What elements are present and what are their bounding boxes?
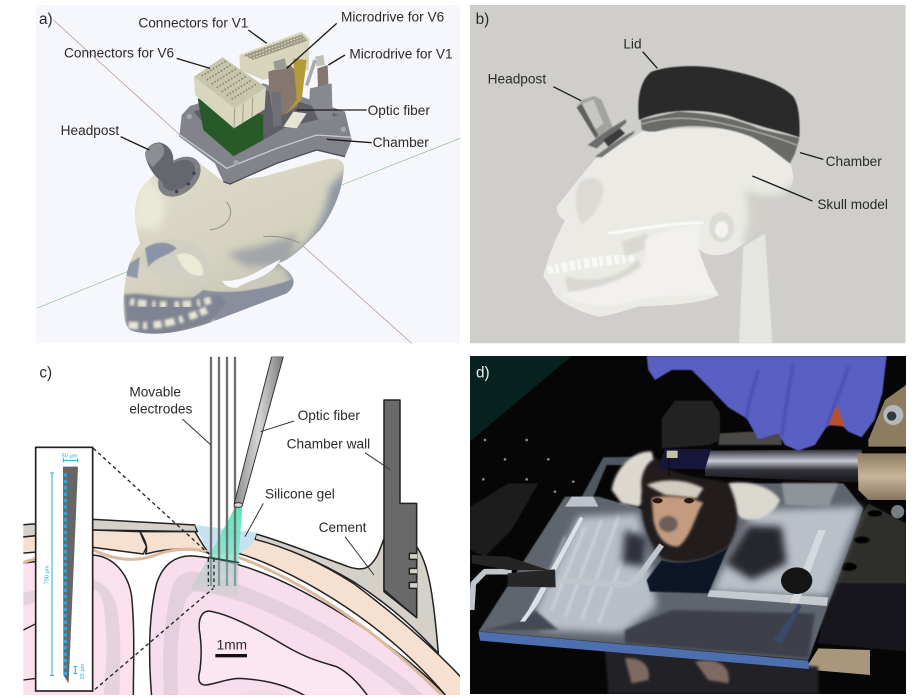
skull shading bbox=[282, 168, 344, 286]
labels and leaders panel a: Microdrive for V6 bbox=[341, 10, 444, 25]
panel c: cross-section schematic bbox=[20, 357, 467, 698]
panel b: photo of printed skull model bbox=[470, 5, 906, 343]
skull bone right bbox=[238, 538, 467, 697]
microdrives bbox=[268, 55, 333, 127]
inset: probe close-up: 790 µm bbox=[45, 565, 51, 584]
ventricle bbox=[199, 611, 368, 697]
support pole bbox=[739, 233, 772, 343]
skull left with bone flap bbox=[20, 519, 209, 563]
chamber wall bbox=[384, 400, 417, 618]
suture lines bbox=[210, 202, 300, 243]
silicone gel bbox=[195, 525, 257, 554]
black cube clamp bbox=[662, 401, 720, 448]
scratch streaks bbox=[545, 517, 635, 623]
labels and leaders panel a: Connectors for V1 bbox=[138, 16, 248, 31]
left hemisphere bbox=[20, 555, 134, 697]
labels and leaders panel a: Headpost bbox=[61, 123, 119, 138]
metal tube and handle bbox=[472, 545, 662, 610]
skull model bbox=[120, 153, 350, 340]
light cone bbox=[190, 507, 242, 597]
cement bbox=[255, 534, 438, 653]
teal corner bbox=[470, 356, 572, 442]
dashed zoom lines bbox=[93, 448, 214, 689]
labels and leaders panel b: Headpost bbox=[488, 71, 546, 86]
left mount block bbox=[470, 483, 538, 557]
labels and leaders panel c: Optic fiber bbox=[298, 408, 360, 423]
acrylic plate bbox=[478, 483, 863, 669]
labels and leaders panel c: Movable bbox=[129, 385, 181, 400]
skull soft shading bbox=[742, 184, 792, 243]
neck cutout bbox=[647, 547, 728, 593]
labels and leaders panel c bbox=[39, 364, 391, 575]
pia line bbox=[208, 557, 239, 563]
glove shading bbox=[747, 363, 848, 437]
dark table studs bbox=[482, 439, 575, 493]
orbit bbox=[144, 240, 177, 254]
labels and leaders panel b: Skull model bbox=[817, 197, 888, 212]
labels and leaders panel a: Microdrive for V1 bbox=[349, 47, 453, 62]
labels and leaders panel c: Cement bbox=[319, 520, 367, 535]
head bar and rod bbox=[658, 449, 862, 483]
chamber band bbox=[641, 112, 799, 163]
chamber bbox=[179, 83, 352, 184]
purple glove bbox=[647, 356, 887, 451]
back frame bbox=[580, 457, 652, 500]
inset: probe close-up: 50 µm bbox=[62, 454, 78, 460]
labels and leaders panel b: b) bbox=[476, 11, 489, 28]
panel d: photo of marmoset in restraint bbox=[470, 356, 906, 694]
marmoset fur and head bbox=[612, 452, 780, 562]
movable electrodes bbox=[211, 357, 235, 586]
tan paper bbox=[805, 648, 870, 675]
jaw band blue bbox=[190, 278, 297, 322]
optic fiber bbox=[234, 357, 283, 507]
labels and leaders panel c: Silicone gel bbox=[265, 486, 335, 501]
connectors V1 block bbox=[239, 32, 309, 80]
panel a: 3D model of implant on skull bbox=[36, 5, 460, 343]
labels and leaders panel a: Chamber bbox=[373, 135, 429, 150]
axis lines bbox=[37, 20, 460, 343]
labels and leaders panel a: Connectors for V6 bbox=[64, 46, 174, 61]
scale bar: 1mm bbox=[217, 637, 247, 652]
skull model white bbox=[538, 123, 798, 323]
jaw opening bbox=[222, 259, 281, 288]
brass mount bbox=[858, 385, 906, 518]
right metal blocks bbox=[818, 503, 906, 652]
labels and leaders panel b: Lid bbox=[623, 36, 642, 51]
dura stripe right bbox=[238, 557, 443, 697]
labels and leaders panel c: c) bbox=[39, 364, 52, 381]
black knob bbox=[781, 567, 812, 594]
green circuit boards bbox=[198, 98, 263, 156]
inset: probe close-up bbox=[36, 447, 93, 691]
reflection of animal under plate bbox=[605, 650, 818, 694]
headpost metal bbox=[577, 96, 635, 157]
optic fiber and gold flex bbox=[283, 58, 317, 128]
labels and leaders panel a: Optic fiber bbox=[368, 103, 430, 118]
connectors V6 block bbox=[194, 57, 266, 128]
label d: d) bbox=[476, 364, 490, 381]
teeth bbox=[548, 257, 633, 272]
inset: probe close-up: 25 µm bbox=[80, 663, 86, 679]
right hemisphere bbox=[150, 556, 450, 698]
headpost bbox=[145, 142, 201, 197]
labels and leaders panel a bbox=[39, 10, 453, 150]
labels and leaders panel b bbox=[476, 11, 888, 212]
labels and leaders panel b: Chamber bbox=[826, 154, 882, 169]
orange accent bbox=[828, 405, 845, 427]
black lid bbox=[638, 66, 800, 137]
labels and leaders panel a: a) bbox=[39, 11, 53, 28]
screw thread bbox=[718, 430, 782, 445]
labels and leaders panel c: electrodes bbox=[129, 401, 193, 416]
labels and leaders panel c: Chamber wall bbox=[287, 437, 370, 452]
teeth area bbox=[124, 294, 227, 337]
